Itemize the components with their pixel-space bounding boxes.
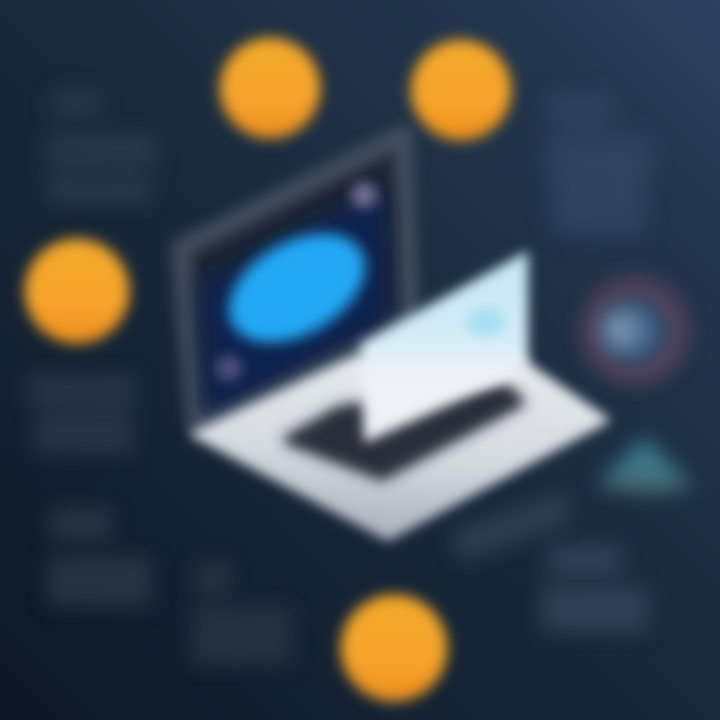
icon: orange circle top right	[407, 36, 515, 144]
icon: orange circle left	[21, 235, 133, 347]
text block: middle left	[28, 374, 136, 454]
screen accent top	[351, 182, 377, 208]
text block: lower left	[48, 508, 152, 606]
icon: orange circle top left	[216, 34, 324, 142]
back screen display	[200, 185, 388, 418]
blue ellipse on screen	[210, 211, 384, 365]
ring inner highlight	[603, 312, 639, 348]
screen accent bottom	[216, 355, 242, 381]
text block: lower centre	[192, 560, 292, 666]
ring inner disc	[604, 301, 664, 361]
screen highlight	[466, 308, 506, 336]
icon: orange circle bottom	[337, 591, 451, 705]
icon: teal shape	[596, 436, 694, 494]
text block: upper right	[548, 96, 650, 234]
icon: ring with blue centre	[593, 289, 677, 373]
laptop illustration	[180, 134, 606, 562]
front white screen	[362, 254, 526, 440]
laptop back screen frame	[180, 134, 410, 425]
laptop base	[194, 358, 606, 538]
keyboard	[288, 388, 520, 476]
text block: lower right	[542, 544, 648, 632]
base shadow	[450, 490, 572, 562]
text block: upper left	[46, 90, 158, 204]
